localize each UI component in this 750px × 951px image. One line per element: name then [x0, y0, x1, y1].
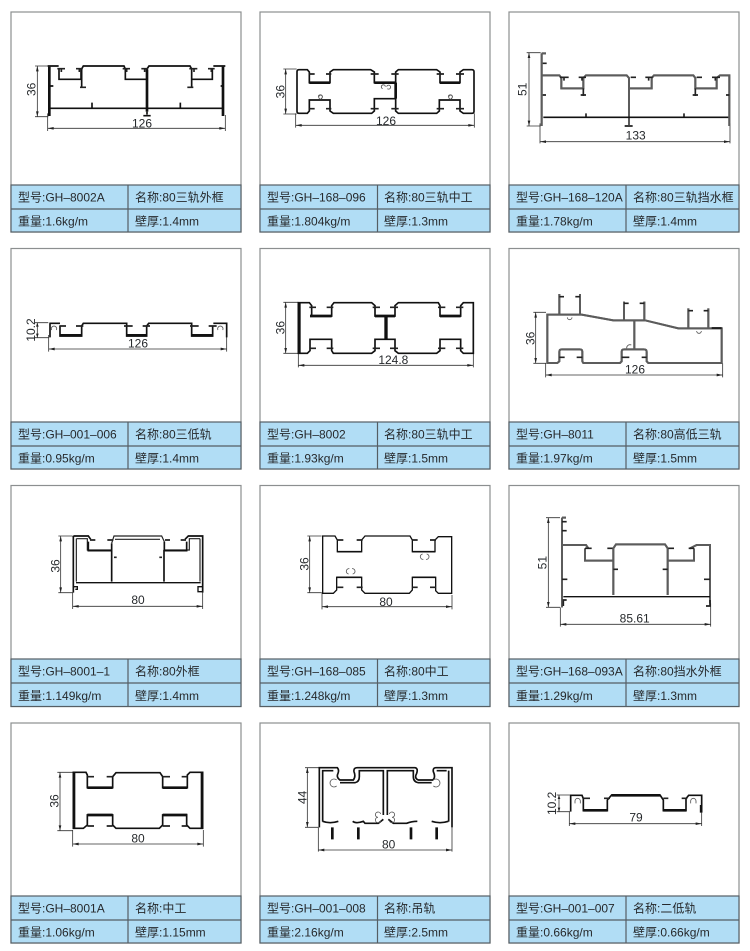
spec table: GH-001-008: 壁厚:2.5mm [384, 924, 448, 940]
profile drawing: GH-001-007: 79 [629, 811, 643, 825]
spec table: GH-8001-1: 重量:1.149kg/m [18, 689, 101, 703]
profile drawing: GH-168-085: 80 [379, 595, 393, 609]
panel: GH-168-093A [509, 486, 739, 706]
profile drawing: GH-8002 [273, 302, 473, 367]
profile drawing: GH-8001-1: 80 [131, 593, 145, 607]
spec table: GH-168-085: 型号:GH–168–085 [267, 664, 366, 678]
spec table: GH-168-085: 重量:1.248kg/m [267, 689, 350, 703]
spec table: GH-168-085: 壁厚:1.3mm [384, 688, 448, 703]
profile drawing: GH-168-120A: 51 [516, 82, 530, 96]
spec table: GH-8002: 重量:1.93kg/m [267, 452, 344, 466]
spec table: GH-8011 [509, 422, 739, 469]
spec table: GH-168-096: 重量:1.804kg/m [267, 214, 350, 228]
spec table: GH-8002: 壁厚:1.5mm [384, 450, 448, 466]
spec table: GH-8001A [11, 896, 241, 943]
spec table: GH-001-006: 重量:0.95kg/m [18, 452, 95, 466]
spec table: GH-001-006: 名称:80三低轨 [135, 426, 212, 442]
spec table: GH-8001-1: 名称:80外框 [135, 664, 200, 678]
profile drawing: GH-8002: 36 [273, 321, 287, 334]
spec table: GH-168-120A: 型号:GH–168–120A [516, 190, 623, 204]
spec table: GH-8011: 重量:1.97kg/m [516, 452, 593, 466]
spec table: GH-8002A: 型号:GH–8002A [18, 190, 105, 204]
profile drawing: GH-168-120A: 133 [626, 128, 646, 142]
spec table: GH-8002A [11, 185, 241, 232]
spec table: GH-001-008: 型号:GH–001–008 [267, 902, 366, 916]
spec table: GH-8001-1: 壁厚:1.4mm [135, 688, 199, 703]
spec table: GH-8001A: 重量:1.06kg/m [18, 926, 95, 940]
spec table: GH-8001A: 型号:GH–8001A [18, 902, 105, 916]
spec table: GH-8001-1 [11, 659, 241, 706]
profile drawing: GH-8011: 126 [625, 362, 645, 376]
spec table: GH-001-006: 型号:GH–001–006 [18, 428, 117, 442]
spec table: GH-168-085: 名称:80中工 [384, 664, 449, 678]
profile drawing: GH-8011: 36 [523, 331, 537, 345]
profile drawing: GH-001-008: 44 [296, 790, 310, 804]
spec table: GH-8001-1: 型号:GH–8001–1 [18, 664, 110, 678]
profile drawing: GH-8002: 124.8 [378, 353, 409, 367]
profile drawing: GH-168-093A: 85.61 [620, 611, 650, 625]
profile drawing: GH-168-120A [516, 53, 730, 143]
spec table: GH-168-096: 型号:GH–168–096 [267, 190, 366, 204]
spec table: GH-168-120A: 名称:80三轨挡水框 [633, 190, 734, 204]
profile drawing: GH-001-007 [545, 791, 702, 826]
panel: GH-8002A [11, 12, 241, 232]
spec table: GH-168-093A: 壁厚:1.3mm [633, 688, 697, 703]
panel: GH-001-008 [260, 723, 490, 943]
profile drawing: GH-001-006: 10.2 [24, 318, 38, 342]
profile drawing: GH-168-085: 36 [298, 557, 312, 571]
profile drawing: GH-8001-1 [48, 536, 203, 609]
profile drawing: GH-8001A: 36 [48, 794, 62, 808]
spec table: GH-8002: 型号:GH–8002 [267, 428, 346, 442]
spec table: GH-001-008 [260, 896, 490, 943]
panel: GH-8011 [509, 248, 739, 469]
panel: GH-8002 [260, 248, 490, 469]
profile drawing: GH-168-085 [298, 536, 452, 609]
spec table: GH-168-093A: 名称:80挡水外框 [633, 664, 722, 678]
spec table: GH-001-007: 重量:0.66kg/m [516, 926, 593, 940]
profile drawing: GH-001-006 [24, 318, 227, 352]
spec table: GH-168-093A [509, 659, 739, 706]
panel: GH-8001-1 [11, 486, 241, 706]
spec table: GH-168-085 [260, 659, 490, 706]
spec table: GH-168-120A: 重量:1.78kg/m [516, 214, 593, 228]
spec table: GH-001-007 [509, 896, 739, 943]
spec table: GH-8011: 壁厚:1.5mm [633, 450, 697, 466]
profile drawing: GH-001-006: 126 [128, 337, 148, 351]
profile drawing: GH-001-008: 80 [382, 837, 396, 851]
profile drawing: GH-168-096 [273, 69, 474, 128]
spec table: GH-8011: 型号:GH–8011 [516, 428, 594, 442]
spec table: GH-168-096 [260, 185, 490, 232]
spec table: GH-8011: 名称:80高低三轨 [633, 426, 722, 442]
spec table: GH-001-007: 名称:二低轨 [633, 900, 696, 916]
spec table: GH-001-006 [11, 422, 241, 469]
profile drawing: GH-001-007: 10.2 [545, 791, 559, 815]
profile drawing: GH-8002A: 36 [25, 82, 39, 96]
panel: GH-001-006 [11, 248, 241, 469]
spec table: GH-001-007: 型号:GH–001–007 [516, 902, 615, 916]
panel: GH-001-007 [509, 723, 739, 943]
spec table: GH-168-096: 壁厚:1.3mm [384, 214, 448, 228]
spec table: GH-001-006: 壁厚:1.4mm [135, 450, 199, 466]
spec table: GH-168-120A [509, 185, 739, 232]
panel: GH-168-120A [509, 12, 739, 232]
spec table: GH-001-007: 壁厚:0.66kg/m [633, 924, 710, 940]
panel: GH-168-096 [260, 12, 490, 232]
profile drawing: GH-8001-1: 36 [48, 559, 62, 573]
spec table: GH-8002A: 名称:80三轨外框 [135, 190, 224, 204]
profile drawing: GH-8011 [523, 294, 723, 377]
spec table: GH-8001A: 壁厚:1.15mm [135, 924, 206, 940]
spec table: GH-8002A: 壁厚:1.4mm [135, 214, 199, 228]
spec table: GH-168-096: 名称:80三轨中工 [384, 190, 473, 204]
profile drawing: GH-8001A: 80 [131, 832, 145, 846]
spec table: GH-8001A: 名称:中工 [135, 900, 186, 916]
spec table: GH-8002 [260, 422, 490, 469]
panel: GH-8001A [11, 723, 241, 943]
panel: GH-168-085 [260, 486, 490, 706]
spec table: GH-8002A: 重量:1.6kg/m [18, 214, 88, 228]
profile drawing: GH-8002A: 126 [132, 117, 152, 131]
profile drawing: GH-001-008 [296, 768, 452, 852]
spec table: GH-168-093A: 重量:1.29kg/m [516, 689, 593, 703]
spec table: GH-8002: 名称:80三轨中工 [384, 426, 473, 442]
profile drawing: GH-168-093A: 51 [536, 556, 550, 569]
profile drawing: GH-8002A [25, 66, 225, 131]
profile drawing: GH-8001A [48, 772, 203, 847]
spec table: GH-001-008: 重量:2.16kg/m [267, 926, 344, 940]
profile drawing: GH-168-096: 126 [376, 114, 396, 128]
profile drawing: GH-168-096: 36 [273, 85, 287, 98]
profile drawing: GH-168-093A [536, 518, 711, 627]
spec table: GH-001-008: 名称:吊轨 [384, 900, 435, 916]
spec table: GH-168-120A: 壁厚:1.4mm [633, 214, 697, 228]
spec table: GH-168-093A: 型号:GH–168–093A [516, 664, 623, 678]
